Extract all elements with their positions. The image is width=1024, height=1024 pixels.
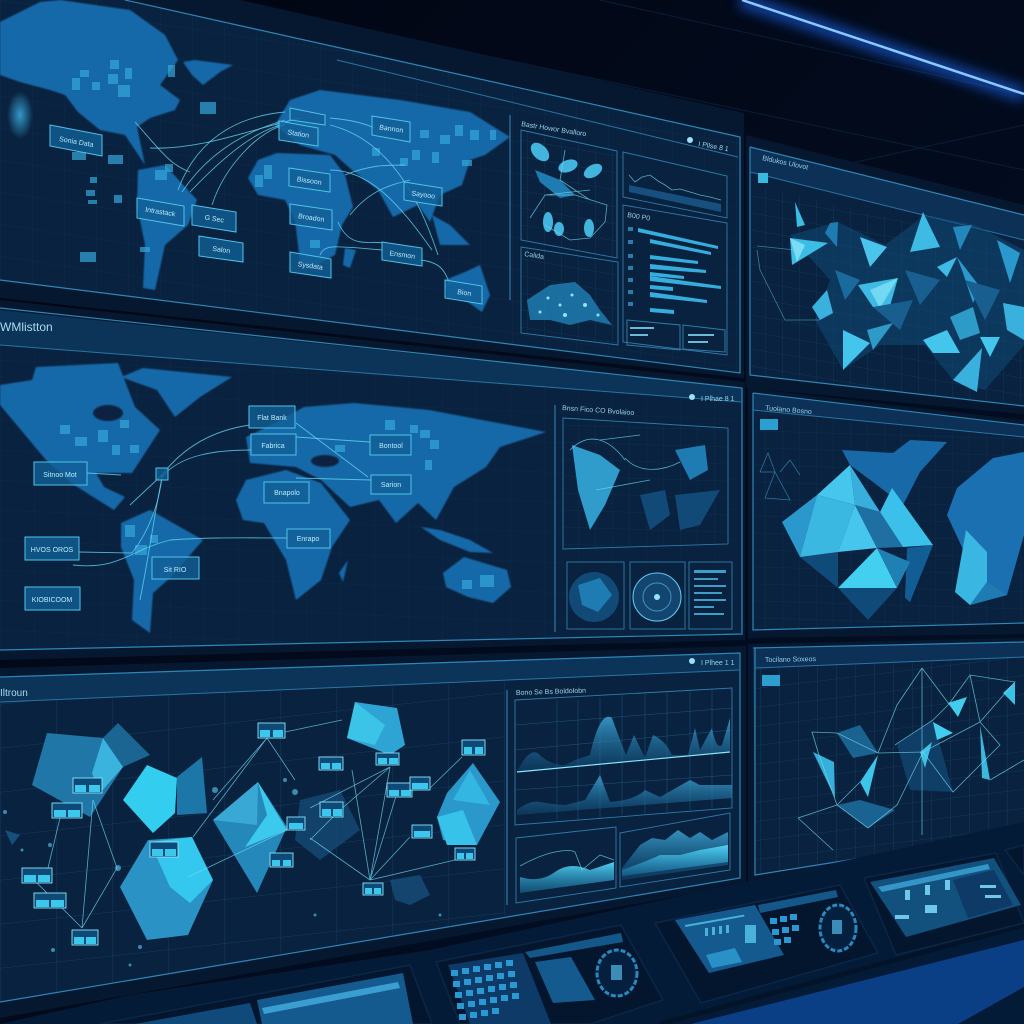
status icons top left — [687, 137, 729, 153]
panel: top left world map screen — [0, 0, 744, 378]
heading: right bottom: Tocilano Soxeos — [765, 656, 817, 664]
area chart: upper dual — [515, 688, 732, 825]
console unit: right screen — [864, 853, 1024, 955]
status icons middle: I Plhae 8 1 — [701, 396, 735, 403]
status icons bottom — [689, 658, 735, 667]
area chart: lower left — [516, 827, 616, 903]
map labels top: Sayooo — [411, 190, 436, 201]
map labels middle: Sitnoo Mot — [43, 472, 77, 479]
map labels top: Station — [287, 129, 310, 140]
heading: right middle: Tuolano Bosno — [765, 405, 812, 416]
low-poly map right top — [790, 202, 1024, 392]
map labels top: G Sec — [204, 215, 225, 225]
panel: middle map inset — [563, 418, 728, 549]
map labels middle: Sit RIO — [164, 567, 187, 574]
console unit: edge — [1005, 845, 1024, 875]
icon: right middle square — [760, 419, 778, 430]
map labels middle — [25, 406, 411, 610]
status icons bottom: I Plhee 1 1 — [701, 660, 735, 667]
map labels top: Bion — [457, 289, 472, 298]
map: world continents middle — [0, 363, 546, 633]
panel: radar sweep inset — [630, 562, 685, 629]
panel: right middle polygon map screen — [748, 388, 1024, 638]
map: pixel data blocks — [72, 60, 496, 262]
map labels top: Bannon — [379, 124, 404, 135]
map: world continents top — [0, 0, 510, 312]
console desk — [0, 822, 1024, 1024]
chart: line chart inset — [623, 152, 727, 218]
heading: bottom dashboard: Bono Se Bs Boldolobn — [516, 688, 586, 697]
low-poly map right middle — [782, 440, 1024, 620]
panel: table inset — [689, 562, 732, 629]
map labels top — [50, 108, 482, 304]
map labels top: Salon — [212, 246, 231, 255]
map labels top: Bissoon — [296, 176, 322, 187]
polyhedra cluster — [5, 702, 500, 940]
area chart: lower right — [620, 813, 730, 887]
network links — [37, 720, 462, 928]
map: pixel data blocks middle — [60, 420, 494, 589]
map labels top: Sysdata — [297, 261, 323, 272]
small node labels — [22, 723, 485, 945]
map labels middle: Enrapo — [297, 536, 319, 543]
map labels middle: Sarion — [381, 482, 401, 489]
heading: middle screen: WMlistton — [0, 320, 53, 334]
panel: radar globe inset — [567, 562, 624, 629]
panel: map density inset: Calida — [524, 251, 544, 261]
wire triangles — [760, 453, 800, 500]
panel: network map inset — [521, 130, 617, 258]
panel: map density inset — [521, 247, 618, 345]
icon: right top square — [758, 173, 768, 183]
ceiling light strip — [740, 0, 1024, 95]
map labels middle: Fabrica — [261, 443, 285, 450]
map labels middle: HVOS OROS — [31, 547, 74, 554]
map labels middle: Flat Bank — [257, 415, 287, 422]
node links right top — [757, 246, 820, 320]
map labels top: Sonia Data — [59, 136, 94, 149]
glow spot — [7, 91, 33, 139]
console unit: keypad — [436, 925, 663, 1024]
status icons top left: I Pllse 8 1 — [698, 141, 729, 153]
heading: top left dashboard: Bastr Howor Bvalloro — [521, 121, 587, 138]
wire polygon network right bottom — [798, 668, 1024, 850]
console unit: far left — [100, 965, 432, 1024]
map labels top: Broadon — [298, 213, 325, 224]
map labels middle: Bontool — [379, 443, 403, 450]
map labels middle: KIOBICOOM — [32, 597, 72, 604]
panel: bottom left network screen — [0, 646, 746, 1018]
flow arcs middle map — [73, 423, 371, 600]
divider of top left screen — [509, 115, 511, 300]
map labels top: Intrastack — [145, 207, 176, 218]
console unit: center screen — [655, 885, 878, 1003]
map labels top: Ensmon — [389, 250, 416, 261]
scatter nodes — [3, 778, 442, 966]
panel: middle left world map screen — [0, 300, 745, 660]
map labels middle: Bnapolo — [274, 490, 300, 497]
icon: right bottom square — [762, 675, 780, 686]
heading: middle dashboard: Bnsn Fico CO Bvolaioo — [562, 405, 635, 417]
chart: horizontal bars inset: B00 P0 — [627, 212, 651, 223]
flow arcs top map — [135, 112, 450, 285]
panel: right bottom network screen — [748, 638, 1024, 884]
panel: right top polygon map screen — [746, 135, 1024, 414]
heading: bottom screen: Iltroun — [0, 688, 28, 699]
dark seas middle map — [93, 405, 339, 467]
status icons middle — [689, 394, 735, 403]
chart: horizontal bars inset — [623, 205, 727, 355]
heading: right top: Bldukos Ulovot — [762, 155, 809, 172]
